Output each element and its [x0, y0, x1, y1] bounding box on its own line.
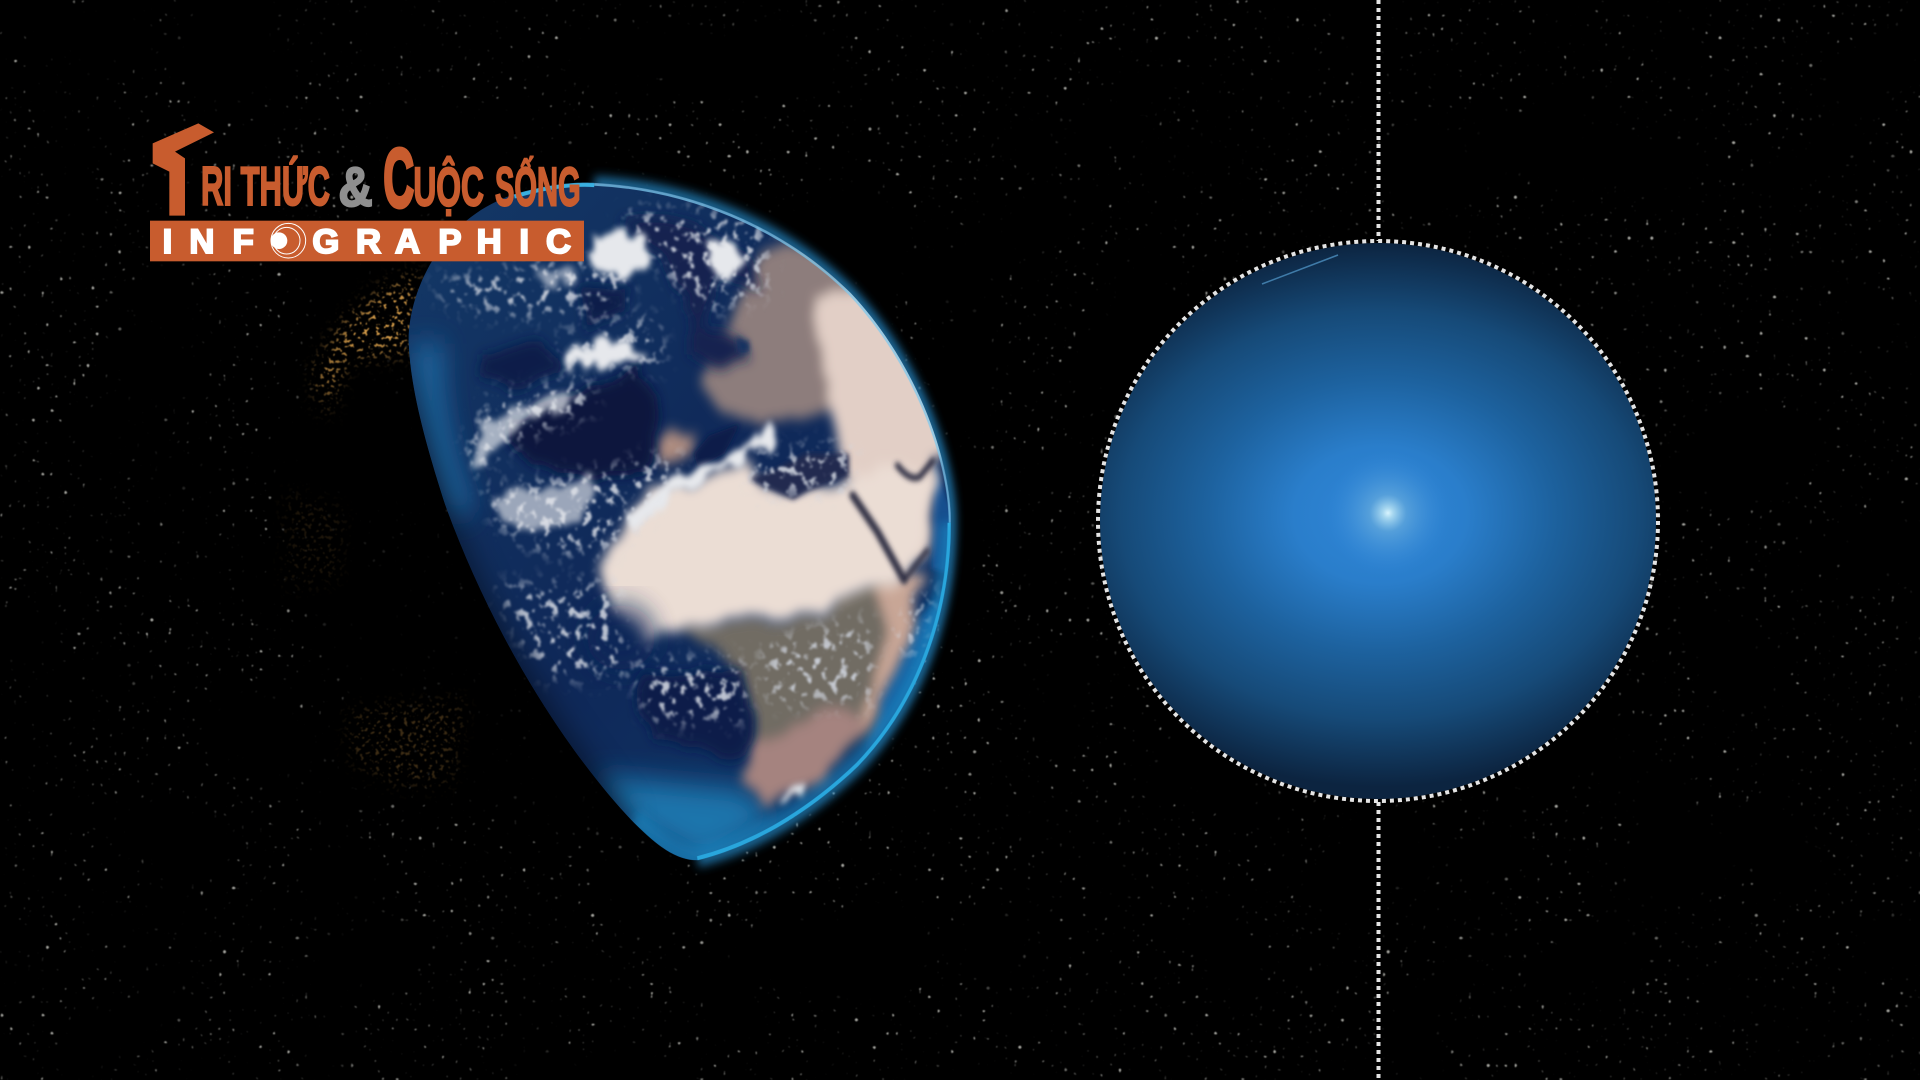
left limb blue haze [409, 344, 476, 518]
night side city lights [285, 272, 465, 785]
logo T mark [153, 123, 214, 216]
banner text: GRAPHIC [312, 223, 571, 261]
sphere bright core [1326, 451, 1450, 575]
logo wordmark: UỘC [413, 156, 484, 218]
Red Sea and Gulf [853, 461, 933, 580]
Arabian Sea and Indian Ocean [866, 595, 944, 750]
southern ocean blue [594, 775, 778, 863]
banner text: INF [163, 223, 254, 261]
sphere body [1100, 243, 1656, 799]
Earth bright limb [514, 183, 951, 860]
dotted vertical line top [1376, 0, 1380, 241]
Sahara west terminator fade [587, 605, 656, 670]
logo wordmark: & [338, 155, 373, 218]
faint streak [1262, 255, 1338, 284]
logo wordmark [201, 132, 581, 225]
inland seas [694, 337, 849, 500]
Earth globe surface [408, 182, 951, 860]
dark oceans and seas [483, 220, 759, 757]
noisy cloud field [430, 211, 939, 720]
terminator shading [412, 369, 640, 822]
logo wordmark: RI THỨC [201, 155, 330, 217]
logo banner [150, 221, 584, 261]
bright solid clouds [472, 233, 803, 805]
Earth [408, 170, 962, 872]
dotted vertical line bottom [1376, 802, 1380, 1080]
logo wordmark: C [383, 132, 414, 225]
dotted circle outline [1098, 241, 1658, 801]
blue sphere with dotted outline [1098, 241, 1658, 801]
night side shadow of Earth [280, 155, 940, 845]
logo: Tri Thức & Cuộc Sống Infographic [150, 123, 584, 261]
Earth atmosphere glow [594, 183, 951, 860]
banner O target icon [271, 223, 306, 258]
Sahara and Arabia [598, 463, 931, 647]
land masses [652, 243, 962, 803]
logo wordmark: SỐNG [495, 156, 581, 218]
